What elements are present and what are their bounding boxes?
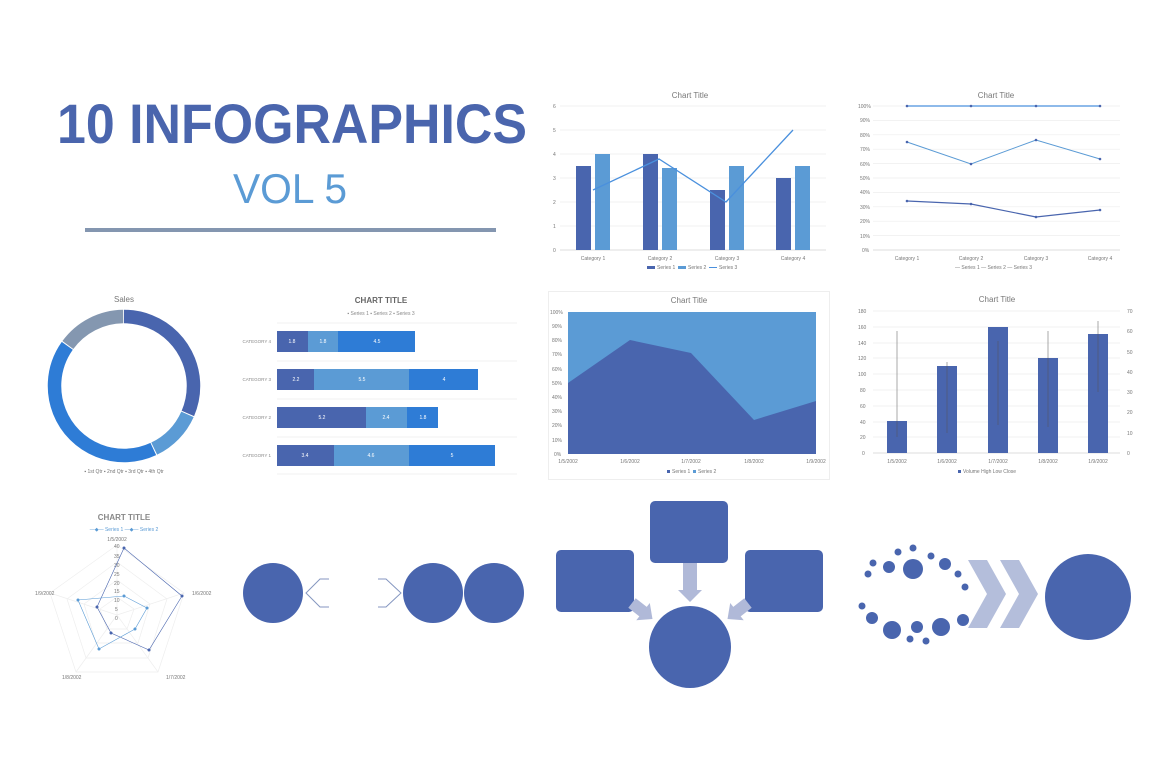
chart: clustered column with line: 2: [553, 200, 556, 206]
chart: clustered column with line: [553, 91, 826, 271]
chart: donut sales: Sales: [114, 295, 134, 304]
chart: line percentage: Category 2: [959, 256, 983, 262]
chart: line percentage: — Series 1 — Series 2 — Series 3: [955, 265, 1032, 271]
chart: stacked area: 0%: [554, 452, 562, 458]
chart: stacked area: 60%: [552, 367, 563, 373]
chart: stock volume-high-low-close: 30: [1127, 390, 1133, 396]
chart: stacked area: 90%: [552, 324, 563, 330]
chart: radar: 15: [114, 589, 120, 595]
chart: stacked area: 50%: [552, 381, 563, 387]
chart: clustered column with line: Category 4: [781, 256, 805, 262]
chart: stacked area: 80%: [552, 338, 563, 344]
chart: stacked area: 30%: [552, 409, 563, 415]
chart: stock volume-high-low-close: 1/5/2002: [887, 459, 907, 465]
chart: stock volume-high-low-close: 120: [858, 356, 867, 362]
chart: stock volume-high-low-close: 60: [1127, 329, 1133, 335]
chart: stacked horizontal bars: 5: [451, 453, 454, 459]
chart: line percentage: Chart Title: [978, 91, 1015, 100]
chart: stock volume-high-low-close: 20: [860, 435, 866, 441]
chart: clustered column with line: Series 1: [657, 265, 676, 271]
chart: clustered column with line: Category 3: [715, 256, 739, 262]
chart: stacked horizontal bars: 4.6: [368, 453, 375, 459]
chart: line percentage: 10%: [860, 234, 871, 240]
chart: radar: 10: [114, 598, 120, 604]
chart: stock volume-high-low-close: 40: [1127, 370, 1133, 376]
chart: stock volume-high-low-close: 160: [858, 325, 867, 331]
diagram: three boxes to circle: [556, 501, 823, 688]
chart: line percentage: 70%: [860, 147, 871, 153]
chart: stock volume-high-low-close: [858, 295, 1133, 475]
chart: line percentage: Category 4: [1088, 256, 1112, 262]
chart: clustered column with line: 6: [553, 104, 556, 110]
chart: stacked horizontal bars: 5.5: [359, 377, 366, 383]
chart: stock volume-high-low-close: 1/9/2002: [1088, 459, 1108, 465]
chart: stacked horizontal bars: CATEGORY 4: [242, 339, 271, 344]
chart: stock volume-high-low-close: 1/6/2002: [937, 459, 957, 465]
chart: stacked horizontal bars: ▪ Series 1 ▪ Series 2 ▪ Series 3: [347, 311, 415, 317]
chart: stacked horizontal bars: 2.2: [293, 377, 300, 383]
chart: stock volume-high-low-close: 50: [1127, 350, 1133, 356]
chart: line percentage: 30%: [860, 205, 871, 211]
chart: stacked area: 40%: [552, 395, 563, 401]
chart: stacked area: Series 1: [672, 469, 691, 475]
chart: line percentage: 80%: [860, 133, 871, 139]
chart: radar: 20: [114, 581, 120, 587]
diagram: circles with brackets: [243, 563, 524, 623]
chart: clustered column with line: 4: [553, 152, 556, 158]
chart: stock volume-high-low-close: 0: [862, 451, 865, 457]
chart: line percentage: 50%: [860, 176, 871, 182]
chart: stacked area: Series 2: [698, 469, 717, 475]
chart: clustered column with line: Category 2: [648, 256, 672, 262]
title: [57, 92, 527, 232]
chart: radar: —◆— Series 1 —◆— Series 2: [90, 527, 158, 533]
chart: stacked area: 1/9/2002: [806, 459, 826, 465]
chart: clustered column with line: 0: [553, 248, 556, 254]
chart: radar: 25: [114, 572, 120, 578]
chart: stacked horizontal bars: CATEGORY 3: [242, 377, 271, 382]
chart: stock volume-high-low-close: 40: [860, 420, 866, 426]
chart: stacked horizontal bars: CATEGORY 2: [242, 415, 271, 420]
chart: stock volume-high-low-close: 0: [1127, 451, 1130, 457]
chart: stock volume-high-low-close: 60: [860, 404, 866, 410]
chart: stacked horizontal bars: 4.5: [374, 339, 381, 345]
chart: line percentage: 40%: [860, 190, 871, 196]
chart: line percentage: 60%: [860, 162, 871, 168]
chart: radar: 0: [115, 616, 118, 622]
chart: line percentage: Category 1: [895, 256, 919, 262]
chart: stacked horizontal bars: 1.8: [289, 339, 296, 345]
chart: stacked horizontal bars: CHART TITLE: [355, 296, 408, 305]
chart: stock volume-high-low-close: 140: [858, 341, 867, 347]
chart: line percentage: 20%: [860, 219, 871, 225]
chart: radar: 1/7/2002: [166, 675, 186, 681]
chart: line percentage: [858, 91, 1120, 271]
chart: stacked area: 10%: [552, 438, 563, 444]
chart: stacked horizontal bars: [242, 296, 517, 474]
chart: stacked area: [548, 292, 830, 480]
chart: stacked horizontal bars: 5.2: [319, 415, 326, 421]
chart: line percentage: 0%: [862, 248, 870, 254]
chart: stock volume-high-low-close: 1/8/2002: [1038, 459, 1058, 465]
chart: clustered column with line: Series 2: [688, 265, 707, 271]
chart: radar: 1/6/2002: [192, 591, 212, 597]
chart: stacked horizontal bars: 1.8: [420, 415, 427, 421]
chart: stock volume-high-low-close: 180: [858, 309, 867, 315]
chart: clustered column with line: Chart Title: [672, 91, 709, 100]
chart: line percentage: 100%: [858, 104, 871, 110]
chart: radar: 1/8/2002: [62, 675, 82, 681]
chart: stock volume-high-low-close: 100: [858, 372, 867, 378]
chart: clustered column with line: Category 1: [581, 256, 605, 262]
chart: stock volume-high-low-close: 10: [1127, 431, 1133, 437]
chart: stacked area: 1/6/2002: [620, 459, 640, 465]
chart: stacked area: 70%: [552, 352, 563, 358]
chart: line percentage: 90%: [860, 118, 871, 124]
chart: clustered column with line: Series 3: [719, 265, 738, 271]
chart: donut sales: [54, 295, 194, 475]
chart: line percentage: Category 3: [1024, 256, 1048, 262]
chart: clustered column with line: 1: [553, 224, 556, 230]
chart: radar: 30: [114, 563, 120, 569]
chart: stock volume-high-low-close: Volume High Low Close: [963, 469, 1016, 475]
chart: donut sales: ▪ 1st Qtr ▪ 2nd Qtr ▪ 3rd Qtr ▪ 4th Qtr: [84, 469, 164, 475]
chart: radar: 1/9/2002: [35, 591, 55, 597]
chart: stock volume-high-low-close: 70: [1127, 309, 1133, 315]
chart: stacked horizontal bars: 2.4: [383, 415, 390, 421]
chart: stacked area: 1/7/2002: [681, 459, 701, 465]
chart: radar: 40: [114, 544, 120, 550]
chart: stock volume-high-low-close: 1/7/2002: [988, 459, 1008, 465]
chart: stacked area: 1/5/2002: [558, 459, 578, 465]
chart: clustered column with line: 5: [553, 128, 556, 134]
chart: stacked area: Chart Title: [671, 296, 708, 305]
diagram: dots, chevrons and circle: [858, 544, 1131, 644]
chart: stacked horizontal bars: 4: [443, 377, 446, 383]
chart: stacked area: 1/8/2002: [744, 459, 764, 465]
chart: stacked area: 20%: [552, 423, 563, 429]
chart: radar: 5: [115, 607, 118, 613]
chart: stock volume-high-low-close: 20: [1127, 410, 1133, 416]
chart: radar: 35: [114, 554, 120, 560]
chart: clustered column with line: 3: [553, 176, 556, 182]
chart: radar: CHART TITLE: [98, 513, 151, 522]
chart: stock volume-high-low-close: Chart Title: [979, 295, 1016, 304]
chart: stacked horizontal bars: CATEGORY 1: [242, 453, 271, 458]
chart: stacked horizontal bars: 3.4: [302, 453, 309, 459]
chart: radar: [35, 513, 212, 681]
subtitle: VOL 5: [233, 165, 347, 212]
title: 10 INFOGRAPHICS: [57, 92, 527, 155]
chart: stacked horizontal bars: 1.8: [320, 339, 327, 345]
chart: stacked area: 100%: [550, 310, 563, 316]
chart: stock volume-high-low-close: 80: [860, 388, 866, 394]
chart: radar: 1/5/2002: [107, 537, 127, 543]
